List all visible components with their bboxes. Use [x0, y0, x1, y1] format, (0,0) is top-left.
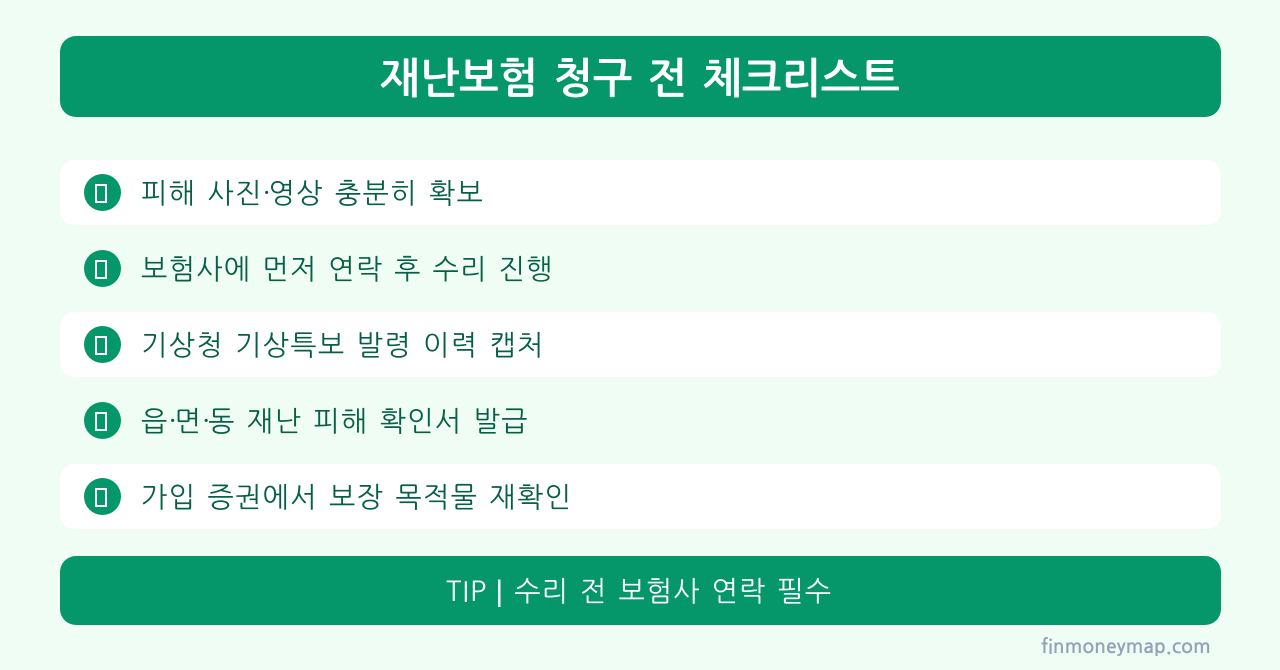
- item text 4: 읍·면·동 재난 피해 확인서 발급: [141, 408, 529, 436]
- checklist item 1: [60, 160, 1221, 225]
- icon: check badge 3: [84, 326, 121, 363]
- checklist item 3: [60, 312, 1221, 377]
- checklist item 2: [84, 250, 554, 287]
- icon: check badge 5: [84, 478, 121, 515]
- icon: check badge 2: [84, 250, 121, 287]
- title banner: 재난보험 청구 전 체크리스트: [380, 59, 900, 100]
- item text 1: 피해 사진·영상 충분히 확보: [141, 180, 484, 208]
- item text 5: 가입 증권에서 보장 목적물 재확인: [141, 484, 572, 512]
- item text 3: 기상청 기상특보 발령 이력 캡처: [141, 332, 545, 360]
- title banner: [60, 36, 1221, 117]
- checklist item 4: [84, 402, 529, 439]
- tip banner: TIP | 수리 전 보험사 연락 필수: [446, 575, 832, 608]
- icon: check badge 4: [84, 402, 121, 439]
- item text 2: 보험사에 먼저 연락 후 수리 진행: [141, 256, 554, 284]
- watermark: finmoneymap.com: [1041, 637, 1211, 656]
- checklist item 5: [60, 464, 1221, 529]
- tip banner: [60, 556, 1221, 625]
- icon: check badge 1: [84, 174, 121, 211]
